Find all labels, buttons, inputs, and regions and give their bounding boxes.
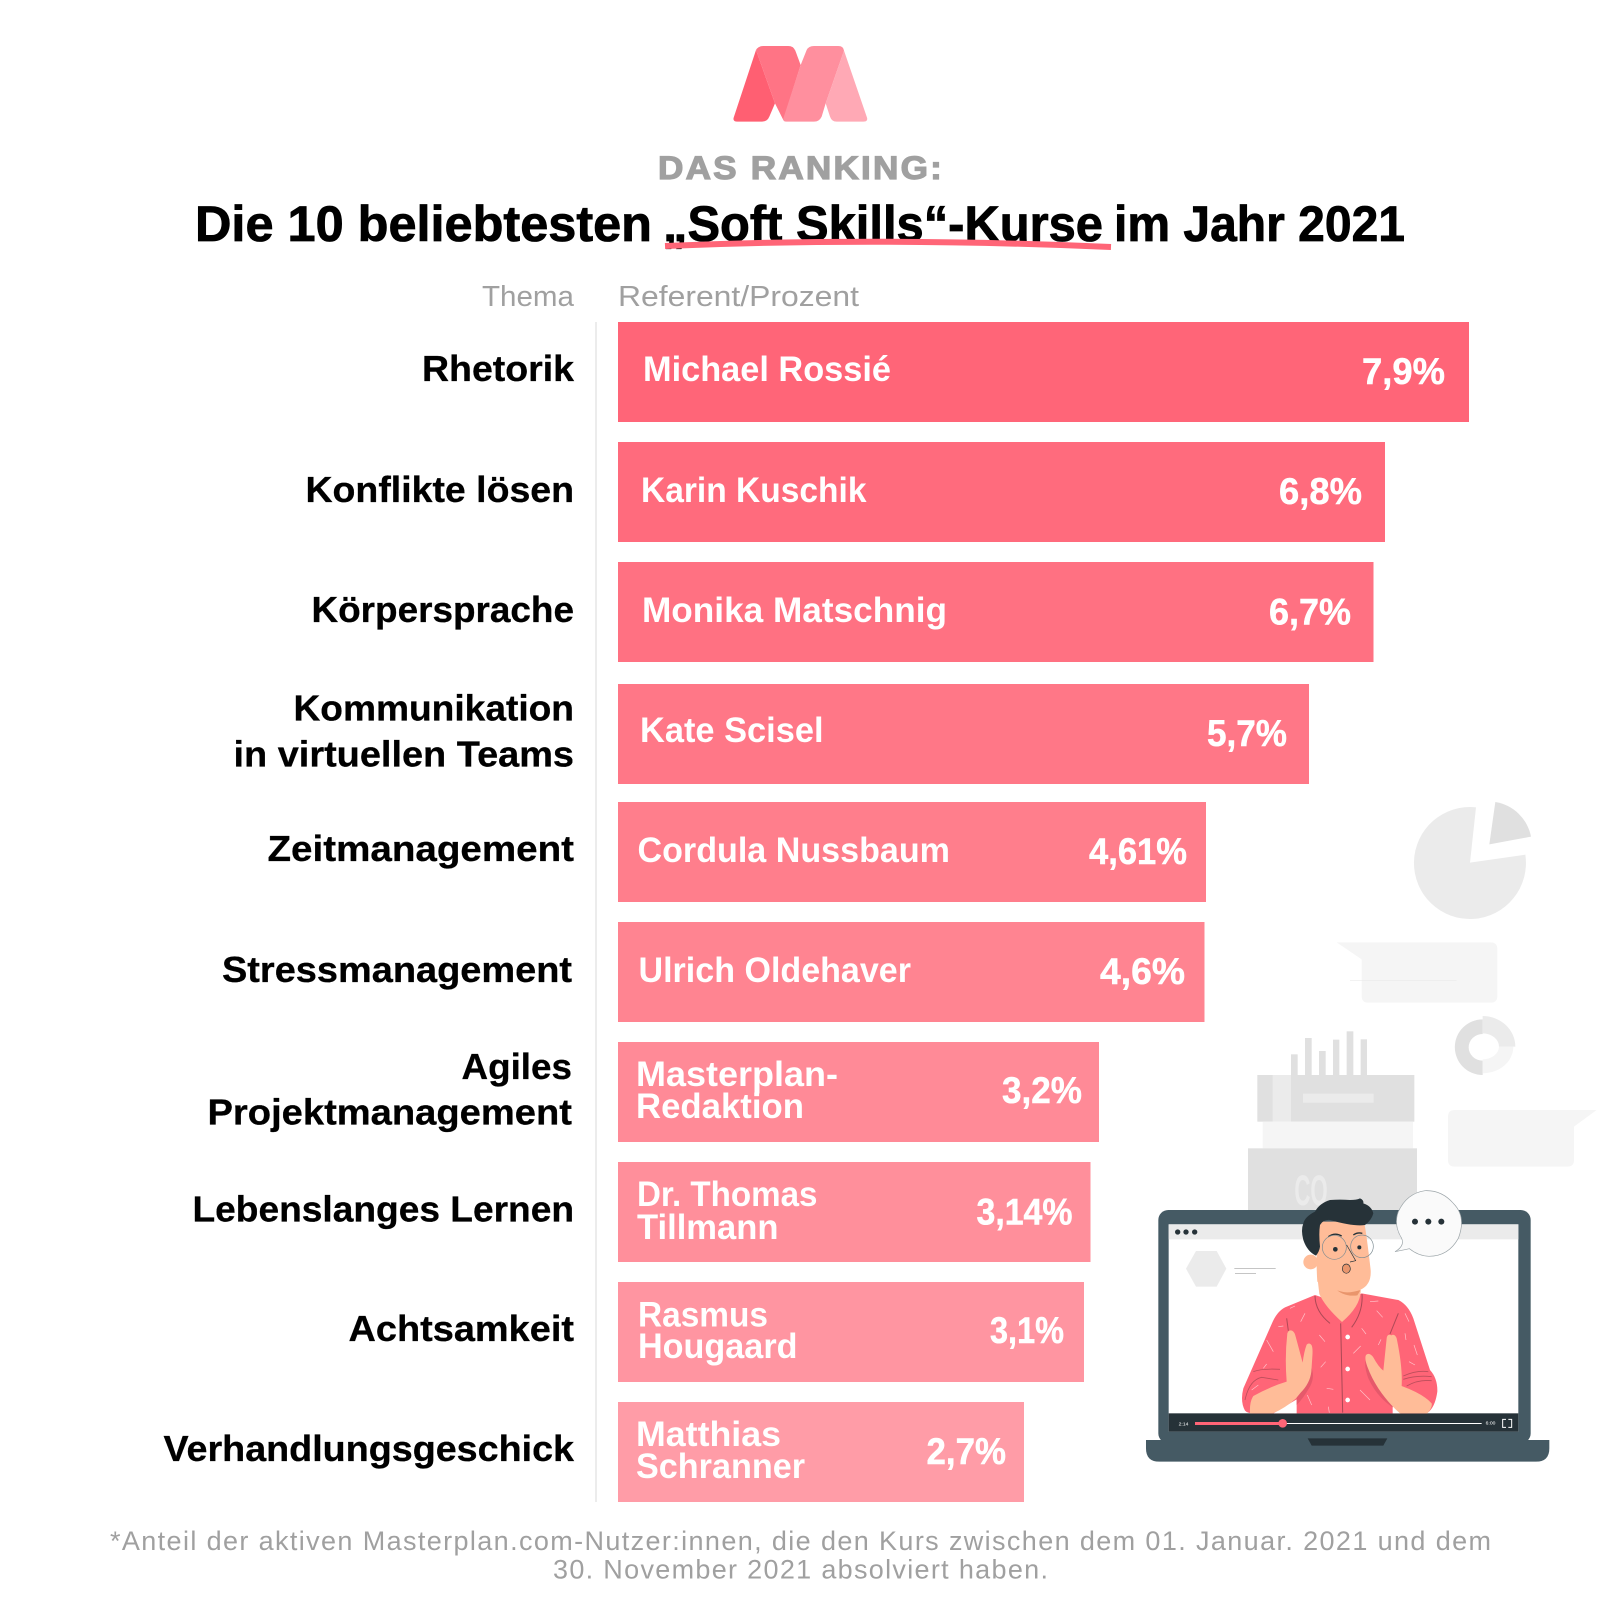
right arm and hand <box>1365 1335 1432 1413</box>
bar: Michael Rossié: Michael Rossié <box>643 350 891 389</box>
bar: Masterplan-Redaktion: Masterplan- <box>636 1055 838 1094</box>
laptop <box>1146 1210 1549 1462</box>
bar: Karin Kuschik: 6,8% <box>1279 471 1362 512</box>
bar: Dr. Thomas Tillmann: 3,14% <box>976 1192 1072 1232</box>
bar: Ulrich Oldehaver: Ulrich Oldehaver <box>638 951 911 990</box>
bar: Matthias Schranner: Matthias <box>636 1415 781 1454</box>
book stack with bar chart: CO <box>1294 1167 1328 1215</box>
speech bubble <box>1395 1191 1462 1256</box>
bar: Dr. Thomas Tillmann: Tillmann <box>637 1208 778 1247</box>
bar: Monika Matschnig <box>618 562 1374 662</box>
pie chart <box>1414 802 1531 919</box>
bar: Ulrich Oldehaver <box>618 922 1204 1022</box>
bar: Rasmus Hougaard: 3,1% <box>990 1310 1064 1351</box>
label: Agiles Projektmanagement: Agiles <box>462 1046 572 1087</box>
title underline <box>665 242 1111 247</box>
label: Agiles Projektmanagement: Projektmanagement <box>208 1092 572 1132</box>
hand shadows <box>1297 1367 1313 1405</box>
speech box right <box>1448 1110 1597 1167</box>
bar: Matthias Schranner <box>618 1402 1024 1502</box>
logo <box>733 46 867 122</box>
bar: Kate Scisel: Kate Scisel <box>640 711 824 750</box>
shirt highlight strokes <box>1252 1301 1417 1413</box>
mouth <box>1342 1264 1350 1273</box>
shirt gaps beside torso <box>1273 1399 1297 1413</box>
column header: Thema: Thema <box>482 281 575 313</box>
footnote <box>110 1526 1491 1584</box>
bar: Michael Rossié <box>618 322 1469 422</box>
face <box>1317 1222 1371 1292</box>
bar: Monika Matschnig: Monika Matschnig <box>642 591 947 630</box>
bar: Dr. Thomas Tillmann <box>618 1162 1090 1262</box>
bar: Masterplan-Redaktion <box>618 1042 1099 1142</box>
title: „Soft Skills“-Kurse <box>663 196 1103 252</box>
bar: Matthias Schranner: Schranner <box>636 1447 805 1486</box>
presenter <box>1242 1198 1437 1413</box>
bar: Cordula Nussbaum: Cordula Nussbaum <box>638 831 950 870</box>
title: Die 10 beliebtesten <box>195 196 652 252</box>
hair <box>1302 1198 1373 1256</box>
label: Rhetorik: Rhetorik <box>422 348 575 389</box>
bar: Dr. Thomas Tillmann: Dr. Thomas <box>637 1175 818 1214</box>
label: Lebenslanges Lernen: Lebenslanges Lernen <box>192 1188 574 1230</box>
label: Zeitmanagement: Zeitmanagement <box>268 828 574 869</box>
footnote: 30. November 2021 absolviert haben. <box>553 1554 1048 1584</box>
video player controls: 6:00 <box>1486 1421 1496 1427</box>
background illustration: charts and books <box>1248 802 1597 1215</box>
speech box left <box>1337 942 1497 1003</box>
label: Agiles Projektmanagement <box>208 1046 572 1132</box>
bar: Kate Scisel: 5,7% <box>1207 713 1287 754</box>
book stack with bar chart <box>1248 1031 1417 1215</box>
bar: Cordula Nussbaum: 4,61% <box>1089 831 1187 872</box>
bar: Cordula Nussbaum <box>618 802 1206 902</box>
bar: Rasmus Hougaard <box>618 1282 1084 1382</box>
label: Kommunikation in virtuellen Teams <box>234 688 574 774</box>
video player controls: 2:14 <box>1179 1421 1189 1427</box>
rows of topic labels <box>164 348 575 1469</box>
bar: Matthias Schranner: 2,7% <box>926 1431 1006 1472</box>
left arm and hand <box>1250 1330 1313 1413</box>
laptop illustration with presenter <box>1146 1191 1549 1462</box>
label: Kommunikation in virtuellen Teams: in virtuellen Teams <box>234 734 574 774</box>
bar: Karin Kuschik <box>618 442 1385 542</box>
bar: Karin Kuschik: Karin Kuschik <box>641 471 867 510</box>
label: Stressmanagement: Stressmanagement <box>222 949 572 990</box>
eyebrows <box>1328 1233 1362 1237</box>
footnote: *Anteil der aktiven Masterplan.com-Nutzer:innen, die den Kurs zwischen dem 01. Januar. 2021 und dem <box>110 1526 1491 1556</box>
shirt buttons <box>1345 1335 1350 1339</box>
neck <box>1317 1277 1361 1322</box>
sleeve cuffs <box>1245 1369 1432 1400</box>
label: Achtsamkeit: Achtsamkeit <box>348 1308 574 1349</box>
nose <box>1347 1245 1356 1262</box>
eyes <box>1333 1247 1338 1252</box>
bar: Masterplan-Redaktion: 3,2% <box>1002 1070 1082 1111</box>
bar: Rasmus Hougaard: Rasmus <box>638 1296 768 1334</box>
bar: Monika Matschnig: 6,7% <box>1269 592 1351 632</box>
label: Körpersprache: Körpersprache <box>312 589 574 630</box>
glasses <box>1322 1235 1346 1259</box>
label: Konflikte lösen: Konflikte lösen <box>306 469 574 510</box>
video player controls <box>1169 1413 1518 1432</box>
axis divider <box>595 322 597 1502</box>
bar: Masterplan-Redaktion: Redaktion <box>636 1087 804 1126</box>
bar: Rasmus Hougaard: Hougaard <box>638 1327 798 1366</box>
title: im Jahr 2021 <box>1114 196 1405 252</box>
donut chart <box>1455 1016 1515 1075</box>
shirt <box>1242 1293 1437 1413</box>
bar: Ulrich Oldehaver: 4,6% <box>1100 951 1185 992</box>
bar chart <box>618 322 1469 1502</box>
collar and placket lines <box>1315 1294 1362 1413</box>
column header: Referent/Prozent: Referent/Prozent <box>618 281 859 313</box>
chin shadow <box>1334 1287 1361 1296</box>
title <box>195 196 1405 252</box>
bar: Kate Scisel <box>618 684 1309 784</box>
eyebrow heading: DAS RANKING: <box>658 150 944 186</box>
ear <box>1303 1255 1318 1269</box>
label: Verhandlungsgeschick: Verhandlungsgeschick <box>164 1428 575 1469</box>
label: Kommunikation in virtuellen Teams: Kommunikation <box>294 688 574 728</box>
bar: Michael Rossié: 7,9% <box>1362 351 1445 392</box>
